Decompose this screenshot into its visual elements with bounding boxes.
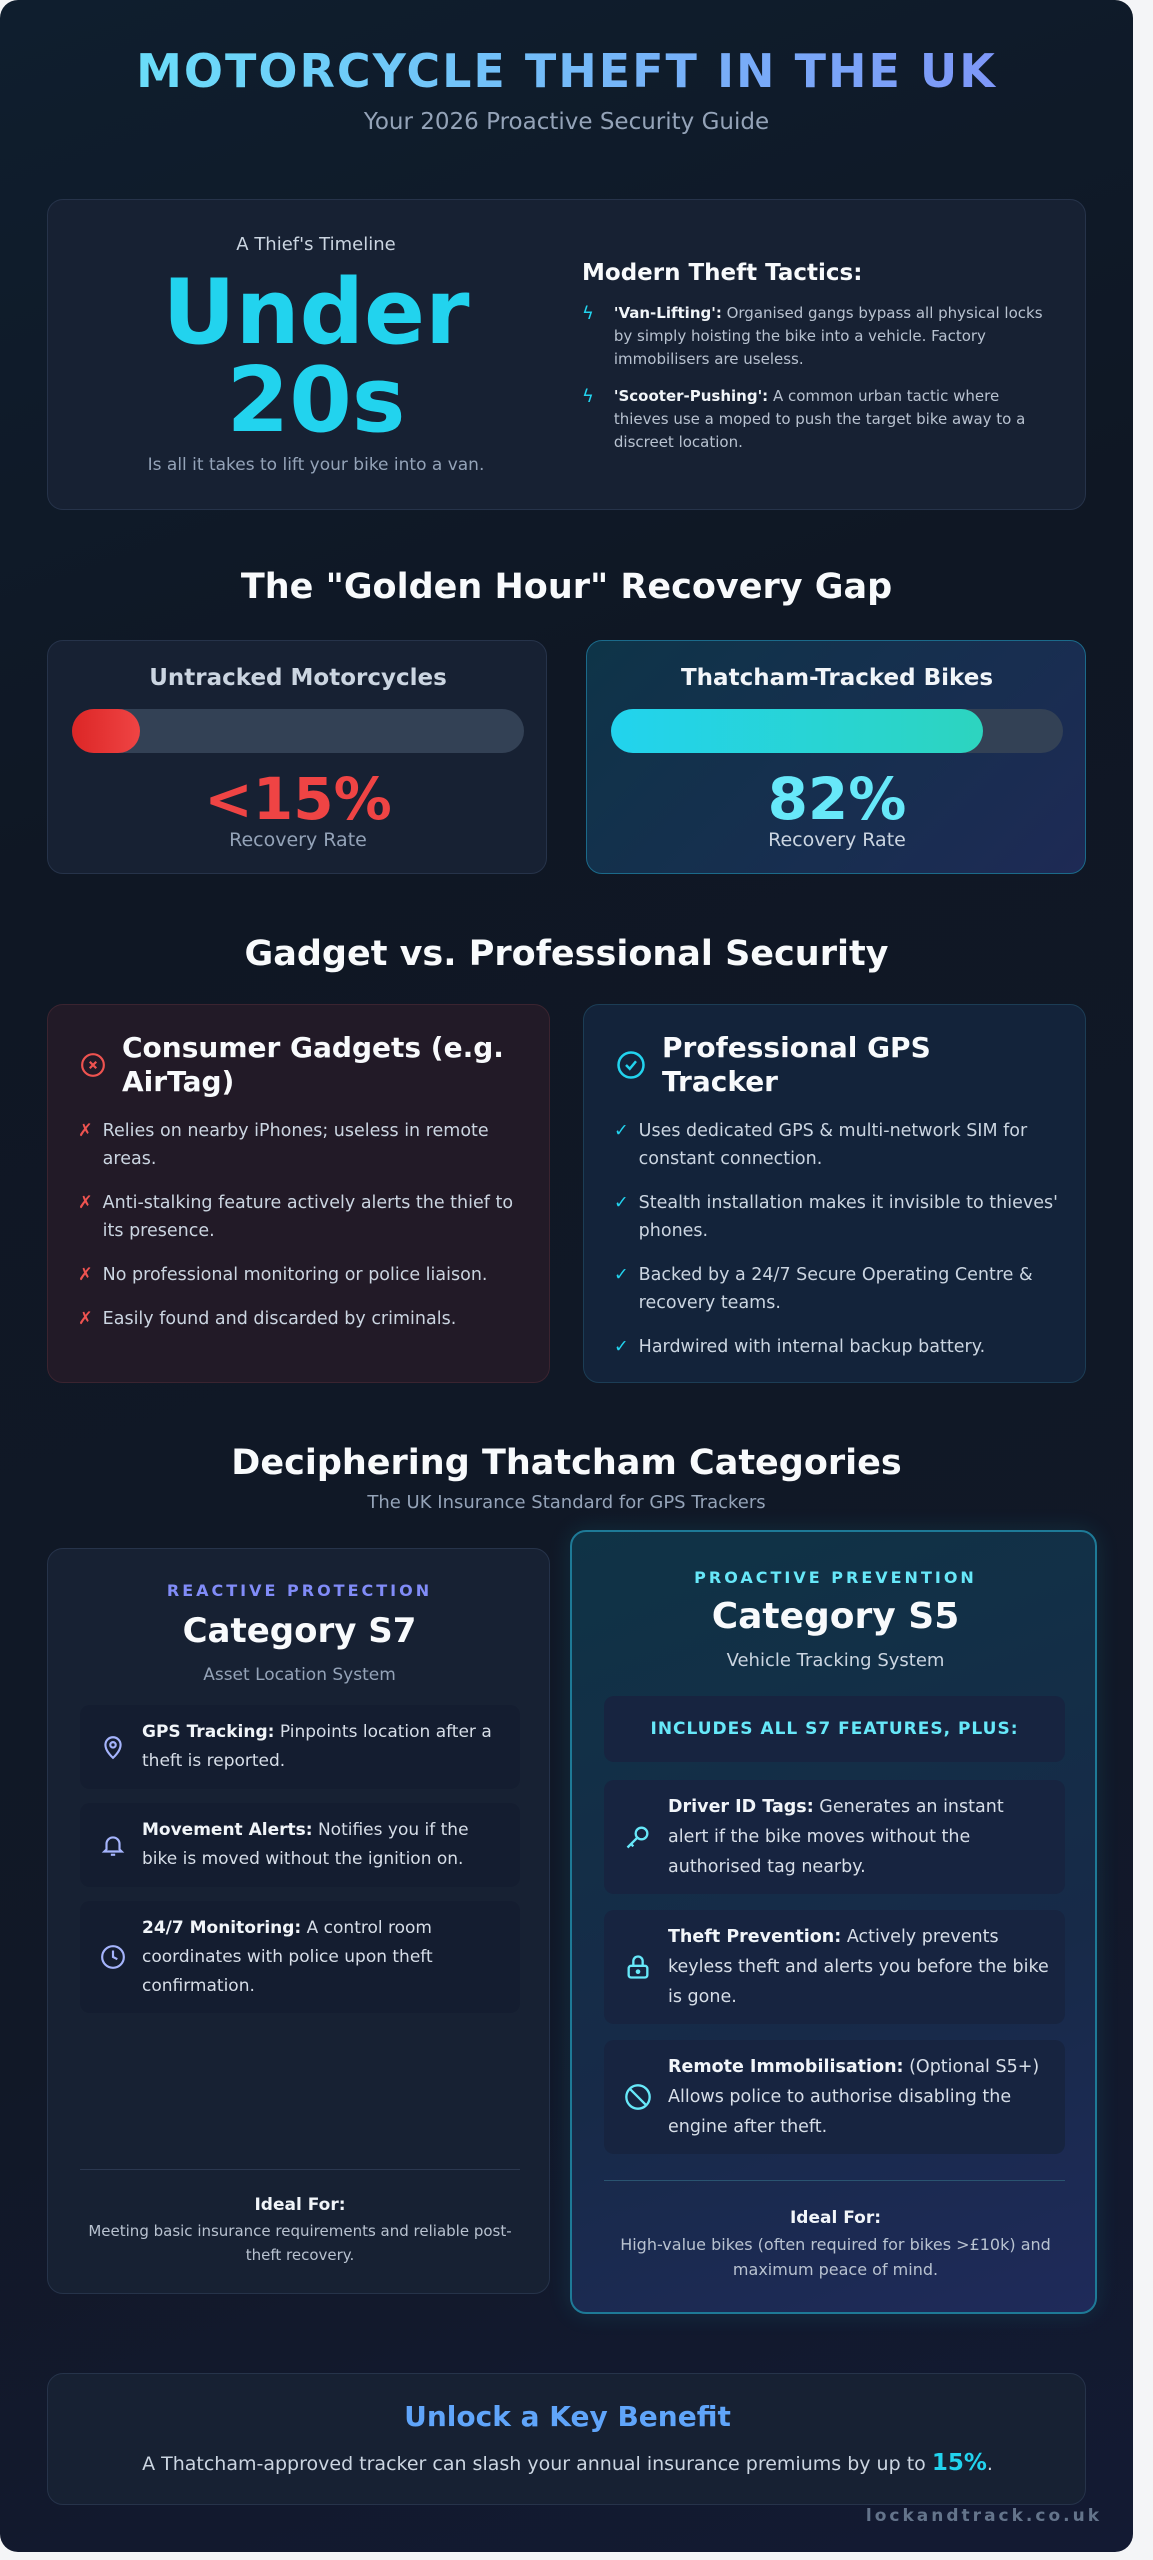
feature: monitoring: 24/7 Monitoring: A control room coordinates with police upon theft confirmation.: [142, 1918, 433, 1996]
panel: key benefit: A Thatcham-approved tracker can slash your annual insurance premiums by up to 15%.: [142, 2450, 993, 2476]
ideal for S5: [620, 2208, 1051, 2279]
list: gadget cons: ✗: [78, 1121, 93, 1141]
tactics list: ϟ: [582, 386, 594, 407]
list: professional pros: Hardwired with internal backup battery.: [639, 1337, 985, 1357]
tactics list: 'Scooter-Pushing': A common urban tactic where thieves use a moped to push the target bike away to a discreet location.: [614, 387, 1025, 451]
timeline stat: Under: [162, 260, 470, 365]
panel: category S7: [47, 1548, 550, 2294]
includes banner: [604, 1696, 1065, 1762]
feature: movement: [80, 1803, 520, 1887]
list: gadget cons: ✗: [78, 1265, 93, 1285]
panel: category S5: Category S5: [712, 1596, 959, 1637]
ideal for S5: High-value bikes (often required for bikes >£10k) and maximum peace of mind.: [620, 2235, 1051, 2279]
heading: thatcham categories: Deciphering Thatcham Categories: [231, 1443, 902, 1483]
footer url: lockandtrack.co.uk: [866, 2506, 1102, 2526]
list: gadget cons: [78, 1121, 513, 1329]
panel: consumer gadgets: Consumer Gadgets (e.g. AirTag): [122, 1031, 504, 1098]
subtitle: Your 2026 Proactive Security Guide: [364, 109, 769, 135]
feature: theft prevention: [604, 1910, 1065, 2024]
tactics list: 'Van-Lifting': Organised gangs bypass all physical locks by simply hoisting the bike into a vehicle. Factory immobilisers are useless.: [614, 304, 1043, 368]
list: gadget cons: Relies on nearby iPhones; useless in remote areas.: [103, 1121, 489, 1169]
list: professional pros: ✓: [614, 1337, 629, 1357]
list: professional pros: ✓: [614, 1193, 629, 1213]
features S5: [604, 1780, 1065, 2154]
tactics list: Modern Theft Tactics:: [582, 260, 862, 286]
panel: category S7: Asset Location System: [203, 1665, 396, 1685]
feature: GPS: [80, 1705, 520, 1789]
feature: monitoring: [80, 1901, 520, 2013]
feature: movement: Movement Alerts: Notifies you if the bike is moved without the ignition on.: [142, 1820, 469, 1869]
panel: tracked: [586, 640, 1086, 874]
list: gadget cons: No professional monitoring or police liaison.: [103, 1265, 487, 1285]
list: professional pros: ✓: [614, 1265, 629, 1285]
timeline stat: [148, 234, 484, 475]
tactics list: ϟ: [582, 303, 594, 324]
panel: category S7: Category S7: [183, 1611, 416, 1651]
panel: professional GPS: [583, 1004, 1086, 1383]
bar untracked: [72, 709, 524, 753]
feature: remote immobilisation: [604, 2040, 1065, 2154]
ideal for S7: Meeting basic insurance requirements and reliable post-theft recovery.: [88, 2222, 512, 2264]
list: professional pros: [614, 1121, 1058, 1357]
list: professional pros: ✓: [614, 1121, 629, 1141]
panel: tracked: Recovery Rate: [768, 829, 906, 851]
ideal for S5: Ideal For:: [790, 2208, 881, 2228]
ideal for S7: Ideal For:: [254, 2195, 346, 2215]
bar tracked: [611, 709, 1063, 753]
title: MOTORCYCLE THEFT IN THE UK: [136, 44, 997, 98]
panel: key benefit: Unlock a Key Benefit: [404, 2400, 731, 2433]
timeline stat: Is all it takes to lift your bike into a van.: [148, 455, 484, 475]
feature: GPS: GPS Tracking: Pinpoints location after a theft is reported.: [142, 1722, 492, 1771]
features S7: [101, 1722, 492, 1996]
timeline stat: 20s: [227, 348, 405, 453]
tactics list: [582, 260, 1043, 451]
feature: theft prevention: Theft Prevention: Actively prevents keyless theft and alerts you before the bike is gone.: [668, 1927, 1049, 2007]
panel: category S5: Vehicle Tracking System: [727, 1650, 944, 1671]
feature: remote immobilisation: Remote Immobilisation: (Optional S5+) Allows police to authorise disabling the engine after theft.: [668, 2057, 1039, 2137]
icon: check circle: [617, 1051, 645, 1079]
panel: untracked: [47, 640, 547, 874]
panel: consumer gadgets: [47, 1004, 550, 1383]
feature: driver ID: Driver ID Tags: Generates an instant alert if the bike moves without the authorised tag nearby.: [668, 1797, 1004, 1877]
panel: untracked: Untracked Motorcycles: [149, 665, 447, 691]
list: professional pros: Stealth installation makes it invisible to thieves' phones.: [639, 1193, 1058, 1241]
list: gadget cons: ✗: [78, 1193, 93, 1213]
panel: category S5: PROACTIVE PREVENTION: [694, 1568, 977, 1587]
panel: untracked: Recovery Rate: [229, 829, 367, 851]
panel: tracked: 82%: [768, 765, 906, 833]
panel: tracked: Thatcham-Tracked Bikes: [681, 665, 993, 691]
list: gadget cons: Anti-stalking feature actively alerts the thief to its presence.: [103, 1193, 513, 1241]
panel: thief timeline: [47, 199, 1086, 510]
subheading: The UK Insurance Standard for GPS Trackers: [367, 1492, 766, 1513]
ideal for S7: [88, 2195, 512, 2264]
panel: key benefit: [47, 2373, 1086, 2505]
list: gadget cons: Easily found and discarded by criminals.: [103, 1309, 456, 1329]
feature: driver ID: [604, 1780, 1065, 1894]
timeline stat: A Thief's Timeline: [236, 234, 396, 255]
panel: untracked: <15%: [204, 765, 392, 833]
list: professional pros: Uses dedicated GPS & multi-network SIM for constant connection.: [639, 1121, 1027, 1169]
includes banner: INCLUDES ALL S7 FEATURES, PLUS:: [650, 1719, 1018, 1739]
panel: category S7: REACTIVE PROTECTION: [167, 1581, 432, 1600]
panel: professional GPS: Professional GPS Tracker: [662, 1031, 931, 1098]
list: professional pros: Backed by a 24/7 Secure Operating Centre & recovery teams.: [639, 1265, 1033, 1313]
heading: gadget vs professional: Gadget vs. Professional Security: [244, 934, 888, 974]
icon: x circle: [81, 1053, 105, 1077]
panel: category S5: [570, 1530, 1097, 2314]
heading: golden hour: The "Golden Hour" Recovery Gap: [241, 567, 892, 607]
list: gadget cons: ✗: [78, 1309, 93, 1329]
